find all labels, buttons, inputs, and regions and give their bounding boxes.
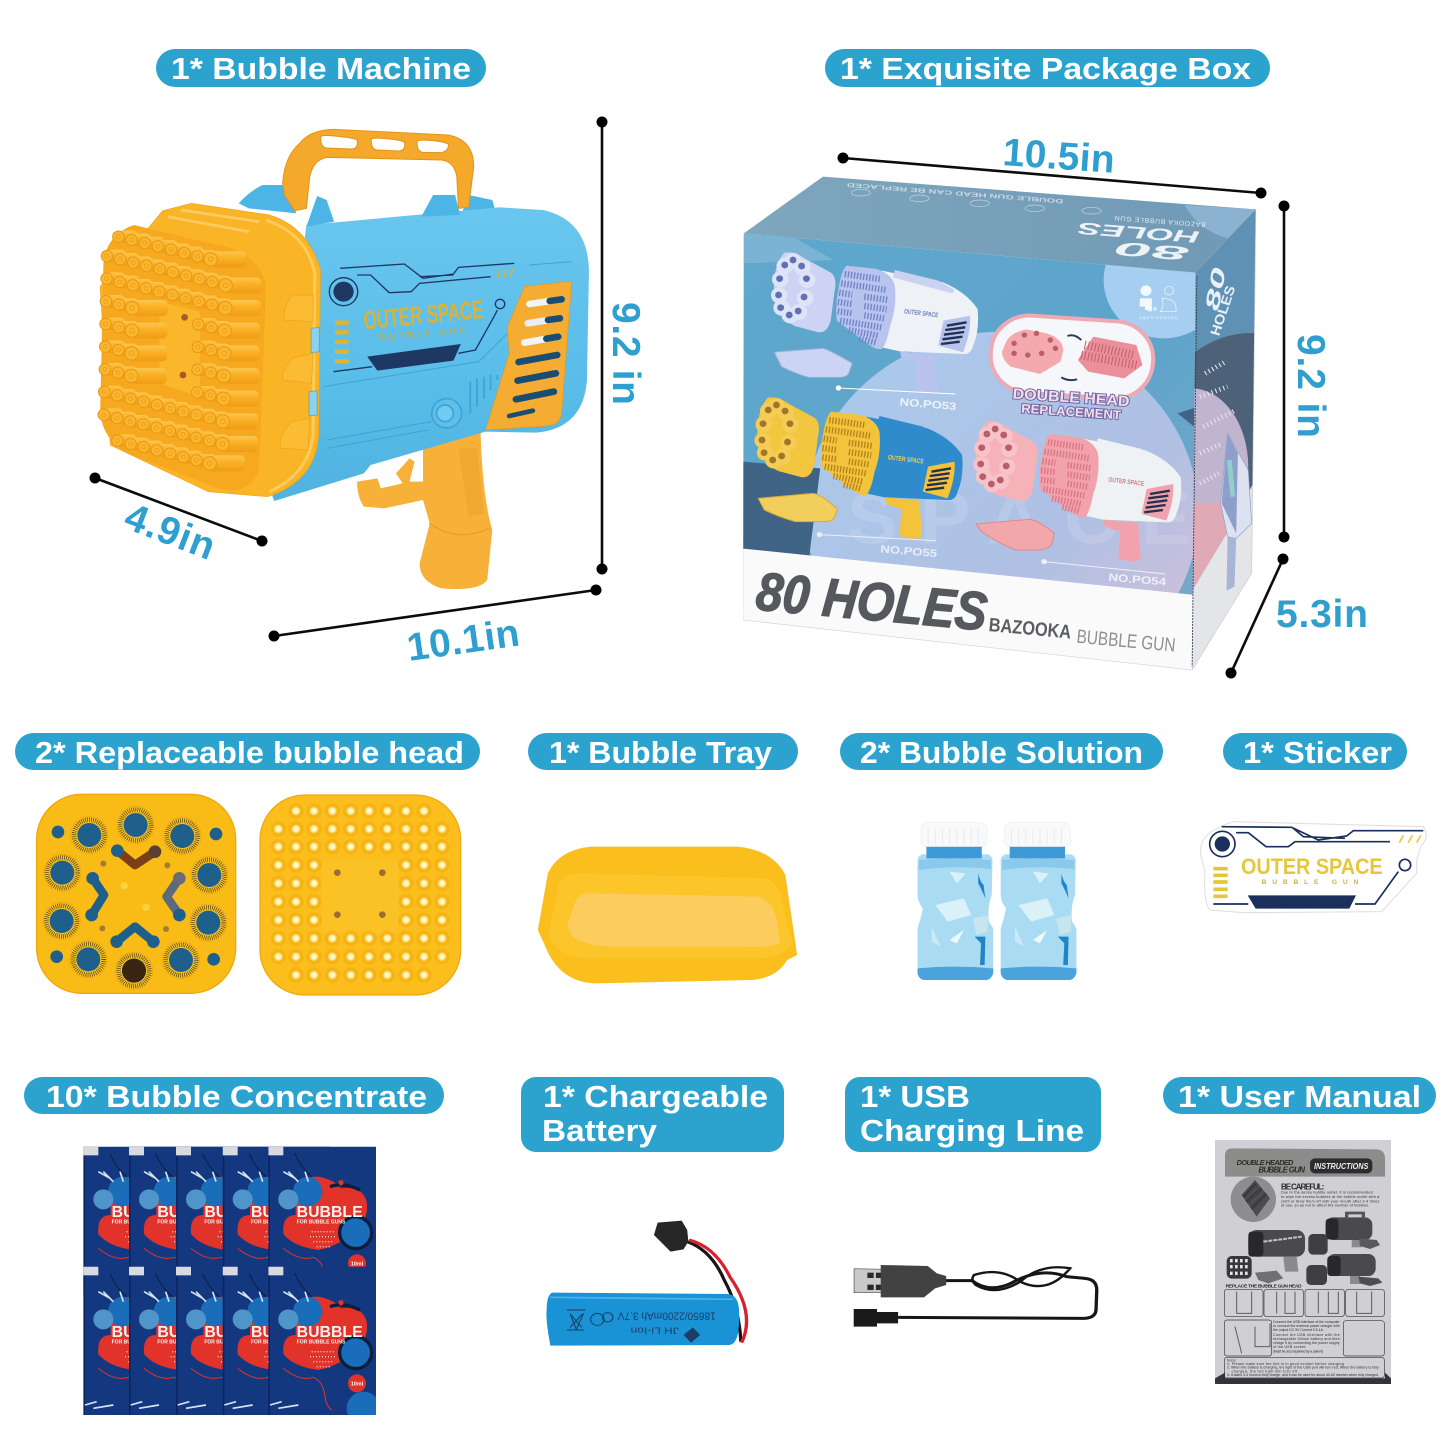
grip ridge (429, 523, 489, 535)
right face title holes: HOLES (1207, 284, 1238, 338)
battery label: 18650/2200mAh 3.7V (617, 1310, 716, 1321)
notes text: 2. When the battery is charging, the light of the USB port will turn red; When the battery is fully (1227, 1366, 1379, 1370)
tray inner (550, 873, 792, 958)
recycle marks (567, 1310, 613, 1330)
bubble rings (117, 806, 154, 844)
bubble solution bottle 2 (1001, 822, 1076, 980)
bubble concentrate sachets (83, 1147, 380, 1425)
sticker circuit (1210, 827, 1423, 904)
box front subtitle bold: BAZOOKA (988, 614, 1072, 643)
manual gun lower right (1327, 1254, 1376, 1284)
circuit decoration (329, 263, 514, 372)
carrying handle (283, 129, 474, 211)
mini head: pink (973, 421, 1038, 501)
replaceable bubble heads (37, 794, 461, 995)
bubble wand tubes (113, 230, 246, 267)
right face bubbles (1200, 362, 1236, 483)
vent slots (509, 299, 562, 416)
bubble solution bottle 1 (917, 822, 993, 980)
charger connector (854, 1309, 898, 1327)
tick decoration (497, 269, 513, 278)
round button (432, 375, 497, 428)
manual header title: DOUBLE HEADED (1237, 1158, 1294, 1167)
manual tray right lower (1358, 1277, 1382, 1286)
usb instructions: or connect the external power charger with (1273, 1324, 1340, 1328)
bubble head housing (100, 203, 321, 497)
box right face (1192, 210, 1256, 670)
front right slate corner (1178, 408, 1194, 426)
careful text: of use, so as not to affect the number of bubbles. (1281, 1204, 1369, 1208)
center opening (159, 302, 200, 397)
usb instructions: rechargeable lithium battery and then (1273, 1337, 1340, 1341)
notes text: 1. Please make sure the line is in good contact before charging (1227, 1362, 1344, 1366)
red wire (689, 1240, 747, 1343)
bubble tray (538, 847, 797, 983)
box outline right (1192, 209, 1256, 670)
age icon (1139, 285, 1178, 320)
dimension: box length (838, 131, 1266, 198)
heading: 2* Bubble Solution: 2* Bubble Solution (860, 735, 1143, 770)
careful text (1281, 1182, 1380, 1208)
instructions pill (1310, 1158, 1372, 1173)
mini gun: white purple (836, 266, 978, 393)
usb instructions: (Must be accompanied by a parent) (1273, 1350, 1323, 1354)
product photo: bubble machine gun (98, 129, 589, 589)
dimension: gun height: 9.2 in (604, 302, 647, 405)
capsule arrows (1061, 335, 1081, 380)
manual page (1215, 1140, 1391, 1384)
side vent panel (486, 281, 572, 430)
usb contacts (867, 1273, 881, 1290)
mini gun: blue yellow (821, 412, 963, 539)
right face slate band (1193, 333, 1254, 520)
manual gun large (1248, 1230, 1305, 1272)
box front title: 80 HOLES (754, 560, 990, 642)
dimension: box height: 9.2 in (1289, 334, 1332, 438)
sticker ring (1399, 859, 1411, 871)
black wire (687, 1242, 741, 1342)
battery brand: JH Li-Ion (631, 1324, 679, 1335)
heading: 1* Bubble Machine: 1* Bubble Machine (171, 51, 471, 86)
grip shading (458, 448, 484, 517)
capsule pink tube head (1078, 337, 1143, 378)
product photo: package box (730, 177, 1260, 695)
dot grid (288, 803, 432, 819)
back mounts (239, 185, 496, 213)
manual gun top right (1326, 1212, 1372, 1247)
top face lighter circle (1185, 205, 1256, 238)
mini head: purple (771, 252, 835, 332)
battery highlight (550, 1297, 733, 1299)
sticker sub logo: BUBBLE GUN (1262, 879, 1359, 886)
notes text: Note: (1227, 1358, 1237, 1362)
front top right circle (1104, 264, 1196, 338)
heading: 1* Chargeable Battery: 1* Chargeable (543, 1079, 768, 1114)
navy bar (367, 344, 461, 371)
circuit dot (333, 282, 354, 302)
center pegs (121, 882, 150, 911)
front dark navy block (743, 462, 820, 557)
usb instructions: charge it by connecting the power supply (1273, 1341, 1340, 1345)
right face lavender circle (1193, 388, 1248, 543)
manual head left (1227, 1256, 1252, 1279)
capsule pink round head (1002, 329, 1063, 374)
heading: 1* USB Charging Line: 1* USB (860, 1079, 970, 1114)
connector (654, 1221, 688, 1252)
dense hole head (260, 795, 461, 995)
stripe decoration (335, 323, 349, 361)
dimension: gun depth (90, 472, 268, 569)
replace step boxes (1224, 1289, 1384, 1378)
circuit ring (495, 299, 505, 309)
dimension: box height (1278, 200, 1332, 542)
box white band shade (743, 620, 1191, 670)
small screw dots (99, 861, 170, 932)
careful text: Due to the dense bubble outlet, it is recommended (1281, 1191, 1373, 1195)
model line PO53 (836, 385, 957, 413)
right face white lower (1192, 485, 1252, 670)
dimension: box length: 10.5in (1001, 131, 1116, 182)
sticker outline (1201, 822, 1426, 913)
magnified head circle (1231, 1177, 1276, 1222)
double head label: DOUBLE HEAD (1012, 387, 1130, 410)
instructions pill: INSTRUCTIONS (1314, 1161, 1369, 1171)
right face title 80: 80 (1201, 266, 1231, 313)
tray floor (567, 893, 780, 947)
box top face (744, 177, 1256, 273)
gun logo text: OUTER SPACE (362, 294, 485, 335)
sticker stripes (1213, 869, 1228, 896)
heading: 2* Replaceable bubble head: 2* Replaceable bubble head (35, 735, 464, 770)
top face icons (851, 189, 1101, 214)
housing clips (309, 327, 319, 416)
sticker (1201, 822, 1426, 913)
model line PO53: NO.PO53 (899, 397, 957, 413)
Y slot bulbs (85, 844, 186, 948)
manual tray right upper (1359, 1238, 1380, 1249)
box front artwork (743, 234, 1196, 670)
usb instructions: the output DC 5V Current 0.5-1A (1273, 1328, 1324, 1332)
right face pink lower (1192, 503, 1226, 589)
sticker logo: OUTER SPACE (1241, 854, 1383, 879)
front large light circle (810, 332, 1194, 594)
replace head heading: REPLACE THE BUBBLE GUN HEAD (1226, 1284, 1302, 1290)
sticker ticks (1399, 835, 1421, 843)
notes text: charged, the red light will turn off. (1232, 1369, 1298, 1373)
dimension: gun length: 10.1in (404, 612, 522, 670)
mini tray: pink (976, 519, 1054, 550)
screw dots (334, 869, 386, 918)
heading: 1* USB Charging Line (845, 1077, 1101, 1152)
battery logo (684, 1327, 700, 1343)
mini tray: yellow (758, 493, 837, 522)
model line PO55 (817, 532, 938, 560)
usb instructions (1273, 1320, 1340, 1354)
dimension: gun height (596, 116, 647, 574)
usb instructions: Connect the USB interface with the (1273, 1333, 1340, 1337)
careful text: BE CAREFUL: (1281, 1182, 1324, 1191)
heading: 1* Chargeable Battery (521, 1077, 784, 1152)
mini tray: purple (775, 348, 852, 377)
gun sub logo text: BUBBLE GUN (379, 326, 465, 342)
bubble head face (100, 225, 266, 490)
age icon: 3+ (1147, 304, 1158, 314)
cable run (898, 1273, 1097, 1318)
heading: 1* Chargeable Battery: Battery (542, 1113, 658, 1148)
rechargeable battery (546, 1221, 747, 1346)
manual header title 2: BUBBLE GUN (1258, 1166, 1305, 1175)
top rim glare (168, 210, 259, 232)
heading: 1* USB Charging Line: Charging Line (860, 1113, 1084, 1148)
double head label (1012, 387, 1130, 422)
white bottom band (740, 548, 1198, 677)
model line PO55: NO.PO55 (880, 544, 938, 560)
manual bottom dark strip (1215, 1373, 1391, 1384)
notes text: 3. It takes 3-4 hours to fully charge, and it can be used for about 40-60 minutes when fully charged. (1227, 1373, 1379, 1377)
box edge (1192, 276, 1197, 667)
age icon: Ages/edades (1139, 315, 1178, 320)
gun body (273, 207, 589, 501)
mini gun label: blue: OUTER SPACE (887, 454, 925, 466)
manual head right lower (1306, 1265, 1327, 1285)
heading: 1* Sticker: 1* Sticker (1243, 735, 1392, 770)
model line PO54 (1041, 559, 1167, 588)
mini gun label: pink: OUTER SPACE (1108, 477, 1145, 488)
manual tray (1255, 1271, 1283, 1283)
dark ring center (122, 959, 146, 983)
housing lobes (280, 295, 313, 450)
mini gun: pink white (1039, 434, 1181, 561)
round hole head (37, 794, 236, 993)
manual head right upper (1308, 1234, 1328, 1255)
box front subtitle regular: BUBBLE GUN (1076, 626, 1176, 657)
center patch (322, 859, 399, 934)
model line PO54: NO.PO54 (1108, 572, 1167, 588)
sticker circle (1215, 836, 1230, 852)
cable coil (972, 1267, 1070, 1290)
corner holes (50, 826, 222, 966)
trigger and grip (357, 428, 492, 589)
dimension: box depth (1226, 554, 1368, 678)
usb housing (881, 1265, 946, 1297)
faint watermark: SPACE (847, 477, 1191, 559)
housing highlight (266, 220, 315, 492)
careful text: to wipe the excess bubbles at the bubble outlet with a (1281, 1195, 1380, 1199)
mini head: yellow (754, 397, 819, 477)
body panel lines (323, 262, 572, 448)
Y slots (92, 851, 179, 942)
LED dots (181, 314, 188, 321)
top face caption: DOUBLE GUN HEAD CAN BE REPLACED (846, 181, 1063, 204)
top face subtitle: BAZOOKA BUBBLE GUN (1114, 214, 1206, 228)
dimension: gun depth: 4.9in (119, 495, 221, 569)
heading: 1* User Manual: 1* User Manual (1178, 1079, 1421, 1114)
usb instructions: of the USB socket. (1273, 1345, 1306, 1349)
sticker bar (1248, 895, 1356, 909)
double head label: REPLACEMENT (1021, 401, 1122, 422)
usb metal tip (854, 1269, 884, 1293)
top face title 80: 80 (1114, 237, 1190, 264)
mini gun label: white: OUTER SPACE (904, 308, 939, 319)
notes text (1227, 1358, 1379, 1377)
double head capsule (988, 313, 1156, 401)
dimension: box depth: 5.3in (1276, 593, 1368, 636)
usb charging cable (854, 1265, 1097, 1327)
front mounts (306, 195, 460, 227)
right face ghost gun (1221, 433, 1252, 591)
sachet row bottom (83, 1267, 380, 1425)
battery cell (546, 1293, 739, 1346)
user manual (1215, 1140, 1391, 1384)
careful text: cloth or blow them off with your mouth after 3-4 times (1281, 1199, 1380, 1203)
manual header band (1225, 1148, 1385, 1177)
heading: 1* Exquisite Package Box: 1* Exquisite Package Box (840, 51, 1252, 86)
usb instructions: Connect the USB interface of the computer (1273, 1320, 1340, 1324)
sachet row top (83, 1147, 380, 1305)
top face title holes: HOLES (1076, 218, 1200, 246)
heading: 1* Bubble Tray: 1* Bubble Tray (549, 735, 773, 770)
heading: 10* Bubble Concentrate: 10* Bubble Concentrate (46, 1079, 427, 1114)
step sketches (1235, 1292, 1372, 1353)
dimension: gun length (268, 584, 602, 670)
